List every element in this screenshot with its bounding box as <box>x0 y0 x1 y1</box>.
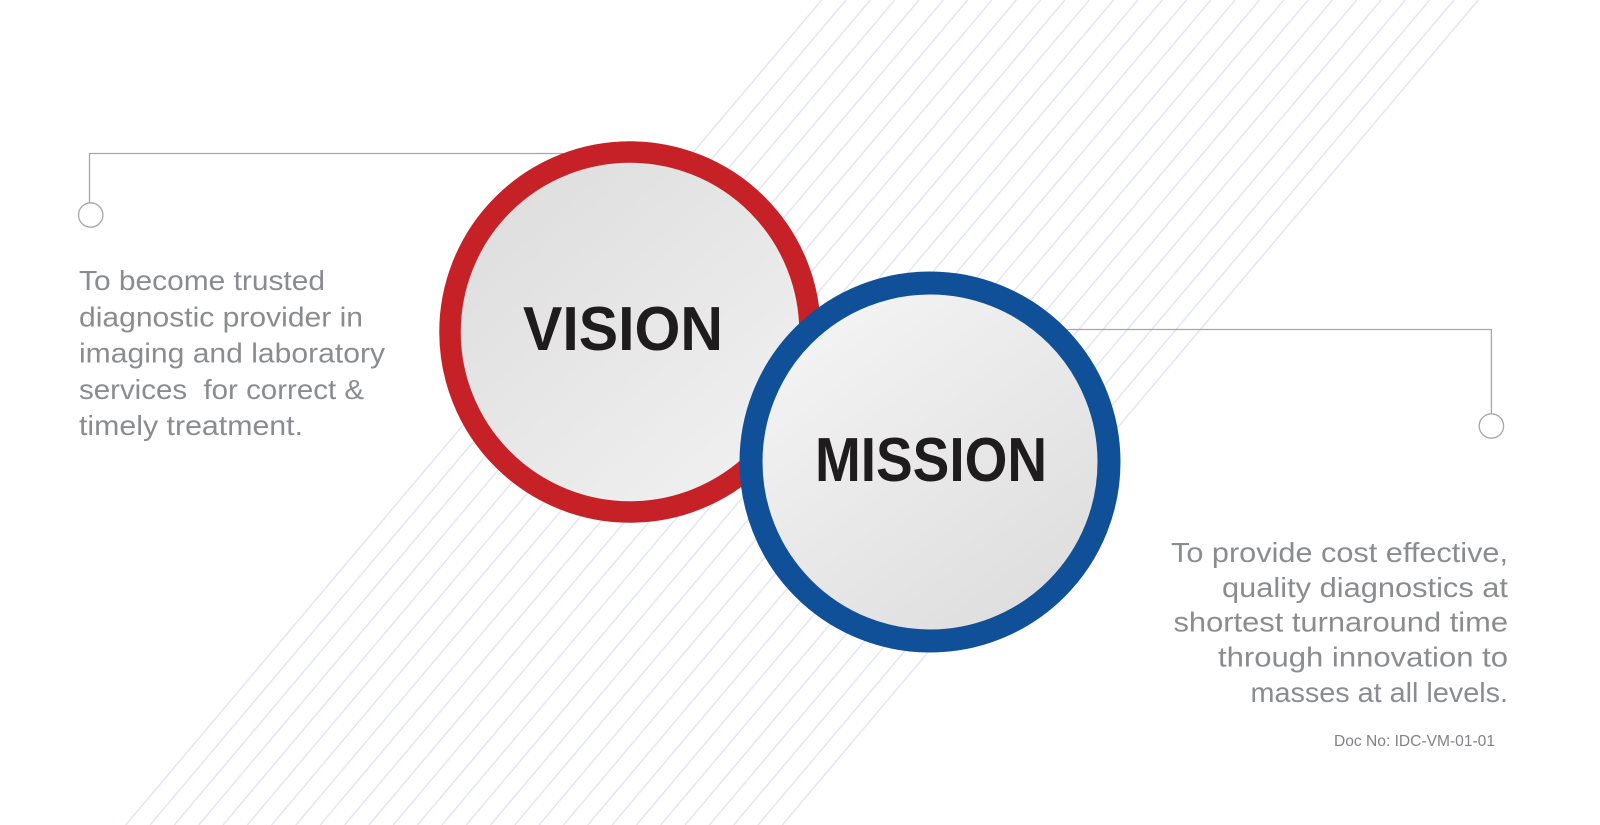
vision label: VISION <box>523 295 723 364</box>
mission circle <box>751 283 1109 641</box>
vision description: diagnostic provider in <box>79 302 363 332</box>
vision description: services for correct & <box>79 374 364 405</box>
vision description: To become trusted <box>79 265 325 296</box>
mission description <box>1171 537 1508 708</box>
vision connector with end node <box>78 154 600 227</box>
vision circle <box>450 152 810 512</box>
vision description: timely treatment. <box>79 410 303 441</box>
vision description <box>79 265 385 441</box>
mission connector with end node <box>1040 330 1504 438</box>
document number: Doc No: IDC-VM-01-01 <box>1334 733 1495 750</box>
mission description: through innovation to <box>1218 642 1508 672</box>
mission description: shortest turnaround time <box>1174 606 1508 638</box>
mission description: quality diagnostics at <box>1222 572 1508 603</box>
mission description: To provide cost effective, <box>1171 537 1508 568</box>
mission description: masses at all levels. <box>1250 677 1508 708</box>
mission label: MISSION <box>815 426 1047 495</box>
vision description: imaging and laboratory <box>79 338 385 368</box>
